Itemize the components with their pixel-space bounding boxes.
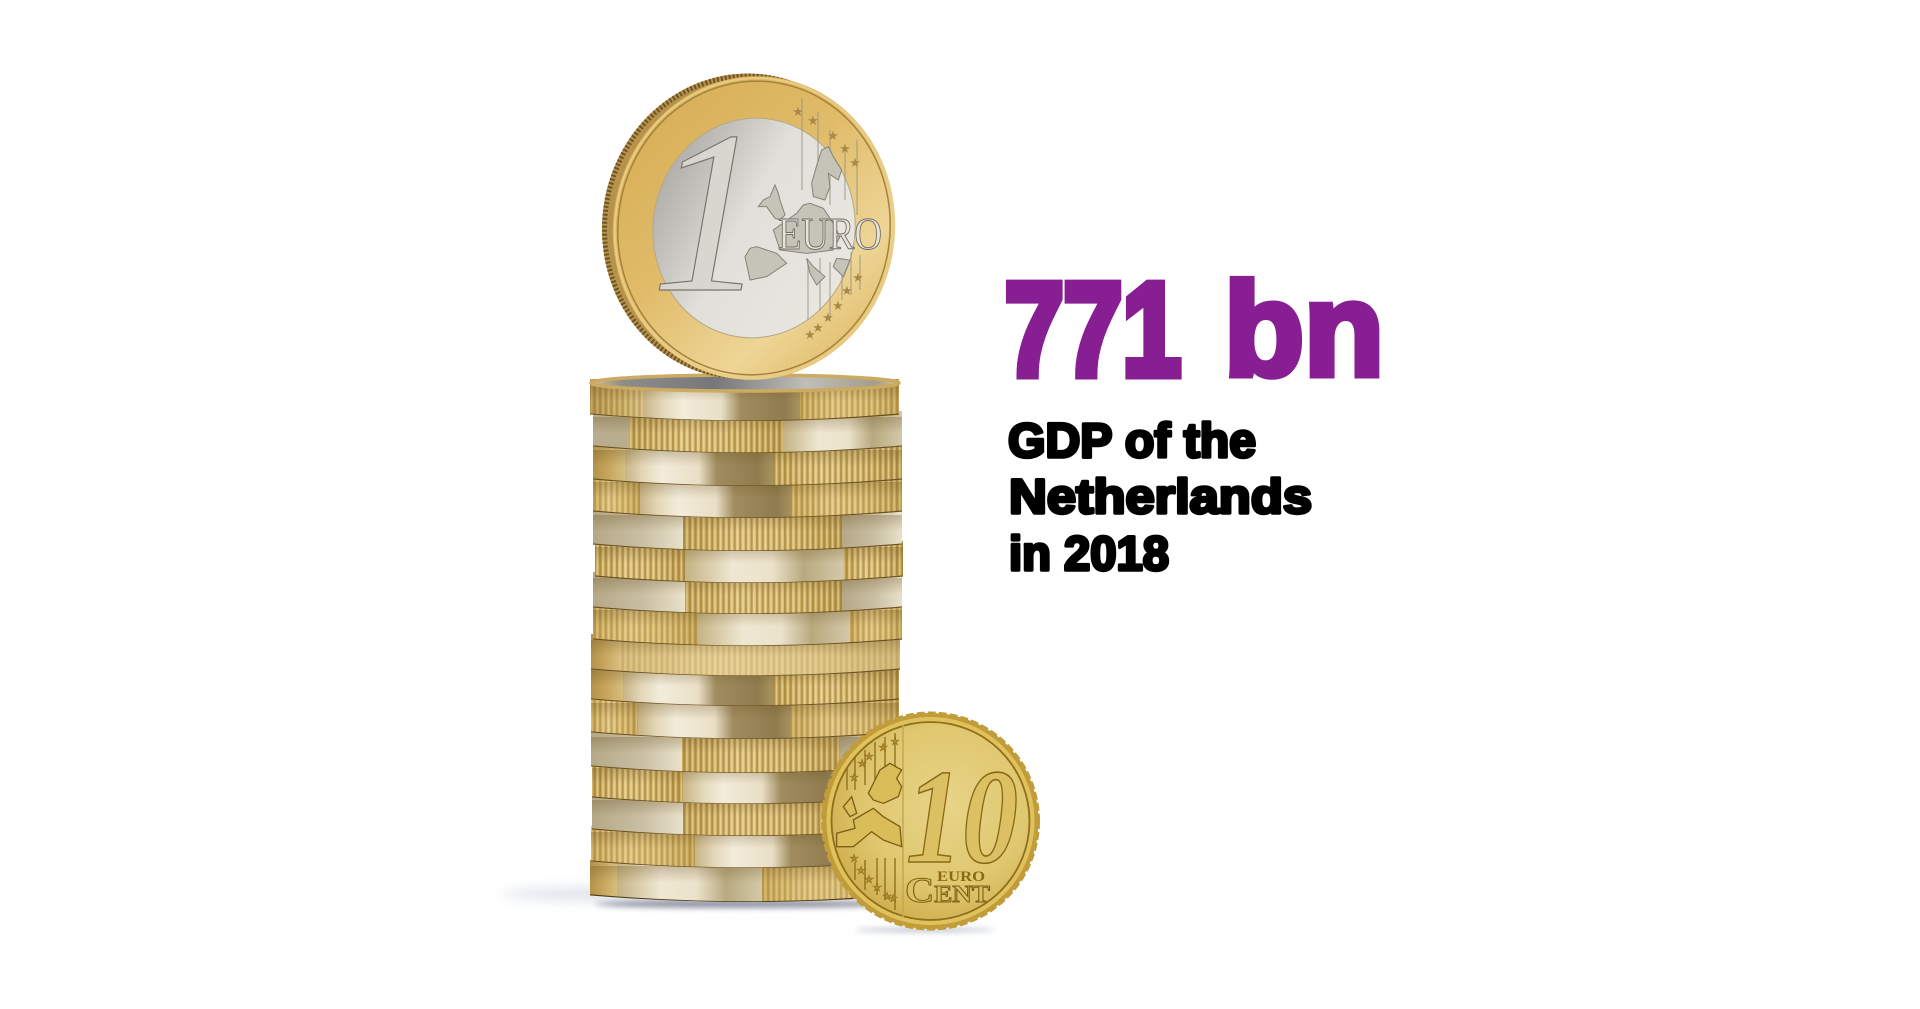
small stars: ★: [890, 736, 900, 748]
stack coin 10: [590, 670, 899, 706]
small stars: ★: [864, 874, 874, 886]
small stars: ★: [849, 772, 859, 784]
small stars: ★: [849, 853, 859, 865]
stars: ★: [849, 155, 861, 170]
small stars: ★: [882, 891, 892, 903]
stars: ★: [812, 320, 824, 335]
coin body: [822, 713, 1038, 929]
vertical lines: [802, 98, 860, 320]
stack coin 5: [592, 512, 902, 551]
stack coin 12: [590, 732, 865, 773]
stars: ★: [832, 298, 844, 313]
small stars: ★: [864, 751, 874, 763]
stack coin 4: [592, 480, 902, 518]
numeral 1: 1: [651, 84, 767, 341]
coin face: [593, 58, 915, 398]
line 2: Netherlands: [1009, 471, 1312, 524]
small stars: ★: [878, 742, 888, 754]
description text: [1008, 415, 1312, 581]
stack coin 13: [592, 766, 833, 804]
stack coin 16: [590, 860, 856, 902]
silver centre: [639, 105, 869, 351]
numeral 10: 10: [906, 743, 1018, 892]
stack coin 2: [592, 411, 902, 453]
stack coin 3: [592, 446, 902, 486]
small stars: ★: [857, 758, 867, 770]
stars: ★: [807, 113, 819, 128]
stack coin 14: [592, 798, 824, 836]
europe map: [745, 147, 850, 285]
stack coin 8: [593, 608, 902, 646]
coin edge: [582, 55, 908, 398]
infographic canvas: [506, 74, 1380, 936]
stack coin 6: [595, 541, 903, 583]
stars: ★: [839, 141, 851, 156]
stars: ★: [804, 327, 816, 342]
small stars: ★: [872, 882, 882, 894]
stack coin 9: [590, 634, 900, 676]
stack shadow: [500, 888, 995, 932]
stars: ★: [841, 283, 853, 298]
europe map: [837, 763, 902, 847]
stars: ★: [827, 128, 839, 143]
small stars: ★: [856, 865, 866, 877]
euro label: EURO: [937, 869, 985, 885]
line 3: in 2018: [1009, 528, 1169, 581]
figure 771: 771: [1005, 256, 1181, 403]
headline: 771 bn: [1005, 256, 1384, 403]
stars: ★: [792, 104, 804, 119]
stars: ★: [852, 270, 864, 285]
stack coin 15: [591, 826, 832, 868]
stack top face: [591, 375, 899, 391]
cent label: CENT: [905, 870, 990, 910]
small stars: ★: [888, 893, 898, 905]
coin stack: [590, 375, 903, 912]
ten cent coin: [822, 713, 1038, 929]
unit bn: bn: [1224, 256, 1384, 403]
stack coin 11: [590, 700, 899, 739]
stars: [792, 104, 864, 342]
stack coin 7: [592, 572, 902, 614]
line 1: GDP of the: [1008, 415, 1256, 468]
one euro coin: [582, 55, 915, 398]
small stars: [849, 736, 900, 905]
stack coin 1: [590, 379, 899, 421]
left stars and lines: [847, 733, 895, 910]
stars: ★: [822, 310, 834, 325]
euro text: EURO: [778, 209, 882, 259]
